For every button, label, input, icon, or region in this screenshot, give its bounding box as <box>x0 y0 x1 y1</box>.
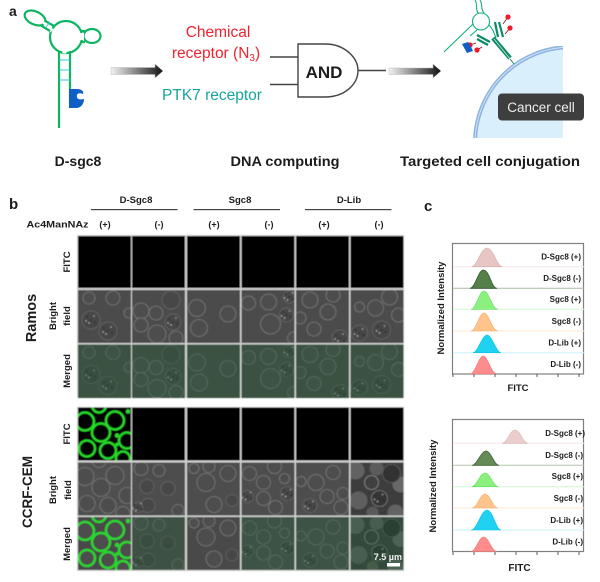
x label bottom: FITC <box>508 563 531 574</box>
histogram: top: D-Lib (+) <box>548 338 581 348</box>
panel label c: c <box>424 198 432 215</box>
row header: Ac4ManNAz: (+) <box>318 220 330 230</box>
text: PTK7 receptor: PTK7 receptor <box>162 87 262 104</box>
scale bar: 7.5 µm <box>374 552 402 562</box>
x label top: FITC <box>507 383 529 394</box>
image grid: CCRF-CEM <box>76 398 408 575</box>
row labels CCRF-CEM <box>48 423 74 561</box>
column header: Sgc8 <box>194 195 280 210</box>
histogram: bottom: D-Lib (-) <box>552 538 583 546</box>
column header: D-Sgc8 <box>91 195 178 210</box>
histogram: bottom: Sgc8 (+) <box>552 472 583 481</box>
row header: Ac4ManNAz: (+) <box>99 220 111 230</box>
row labels Ramos: FITC <box>62 251 73 273</box>
scale bar <box>374 552 402 566</box>
y label top: Normalized Intensity <box>436 261 447 354</box>
icon: D-sgc8 aptamer <box>22 7 100 128</box>
histogram: top: Sgc8 (-) <box>552 317 581 326</box>
row header: Ac4ManNAz <box>26 220 384 230</box>
arrow 2 <box>389 64 441 78</box>
row header: Ac4ManNAz: (-) <box>374 220 384 230</box>
row labels Ramos <box>48 251 73 388</box>
histogram: top: D-Sgc8 (-) <box>543 274 581 283</box>
histogram: top: D-Sgc8 (+) <box>541 252 581 262</box>
row header: Ac4ManNAz: Ac4ManNAz <box>26 220 89 230</box>
arrow 1 <box>111 64 163 78</box>
y label bottom: Normalized Intensity <box>428 439 439 532</box>
row labels CCRF-CEM: Merged <box>62 527 73 561</box>
histogram: top <box>452 244 584 377</box>
label: CCRF-CEM: CCRF-CEM <box>20 456 35 528</box>
panel label b: b <box>9 196 18 213</box>
row labels Ramos: field <box>62 306 73 326</box>
caption: D-sgc8: D-sgc8 <box>55 153 102 169</box>
panel a: schematic <box>9 0 584 169</box>
caption: Targeted cell conjugation: Targeted cell conjugation <box>400 153 580 169</box>
row labels Ramos: Bright <box>48 301 59 330</box>
histogram: top: Sgc8 (+) <box>550 295 581 304</box>
column header: D-Lib: D-Lib <box>337 195 361 206</box>
row labels CCRF-CEM: Bright <box>48 475 59 504</box>
panel c: flow cytometry <box>424 198 585 574</box>
text: chemical receptor: Chemical <box>186 24 250 41</box>
text: receptor N3: ) <box>255 45 260 62</box>
column header: Sgc8: Sgc8 <box>229 195 251 206</box>
AND gate: AND <box>306 63 342 82</box>
panel label a: a <box>9 3 17 19</box>
cancer cell: Cancer cell <box>507 100 575 115</box>
histogram: bottom: D-Sgc8 (-) <box>545 451 583 460</box>
image grid: Ramos <box>77 235 406 400</box>
histogram: bottom: D-Lib (+) <box>550 516 583 525</box>
histogram: bottom: D-Sgc8 (+) <box>545 429 585 438</box>
row labels CCRF-CEM: field <box>63 480 74 500</box>
label: Ramos: Ramos <box>24 294 40 342</box>
row header: Ac4ManNAz: (-) <box>154 220 164 230</box>
row header: Ac4ManNAz: (-) <box>264 220 274 230</box>
cancer cell <box>473 46 584 138</box>
row header: Ac4ManNAz: (+) <box>208 220 220 230</box>
text: receptor N3: 3 <box>249 53 255 64</box>
caption: DNA computing: DNA computing <box>230 153 340 169</box>
panel b: microscopy <box>9 195 408 575</box>
icon: aptamer bound to antibody <box>444 0 514 64</box>
column header: D-Sgc8: D-Sgc8 <box>120 195 152 206</box>
row labels Ramos: Merged <box>62 354 73 388</box>
row labels CCRF-CEM: FITC <box>62 423 73 445</box>
column header: D-Lib <box>305 195 392 210</box>
histogram: bottom <box>452 420 585 555</box>
histogram: bottom: Sgc8 (-) <box>554 494 583 503</box>
AND gate <box>270 44 386 97</box>
text: receptor N3: receptor (N <box>172 45 249 62</box>
histogram: top: D-Lib (-) <box>550 360 581 369</box>
